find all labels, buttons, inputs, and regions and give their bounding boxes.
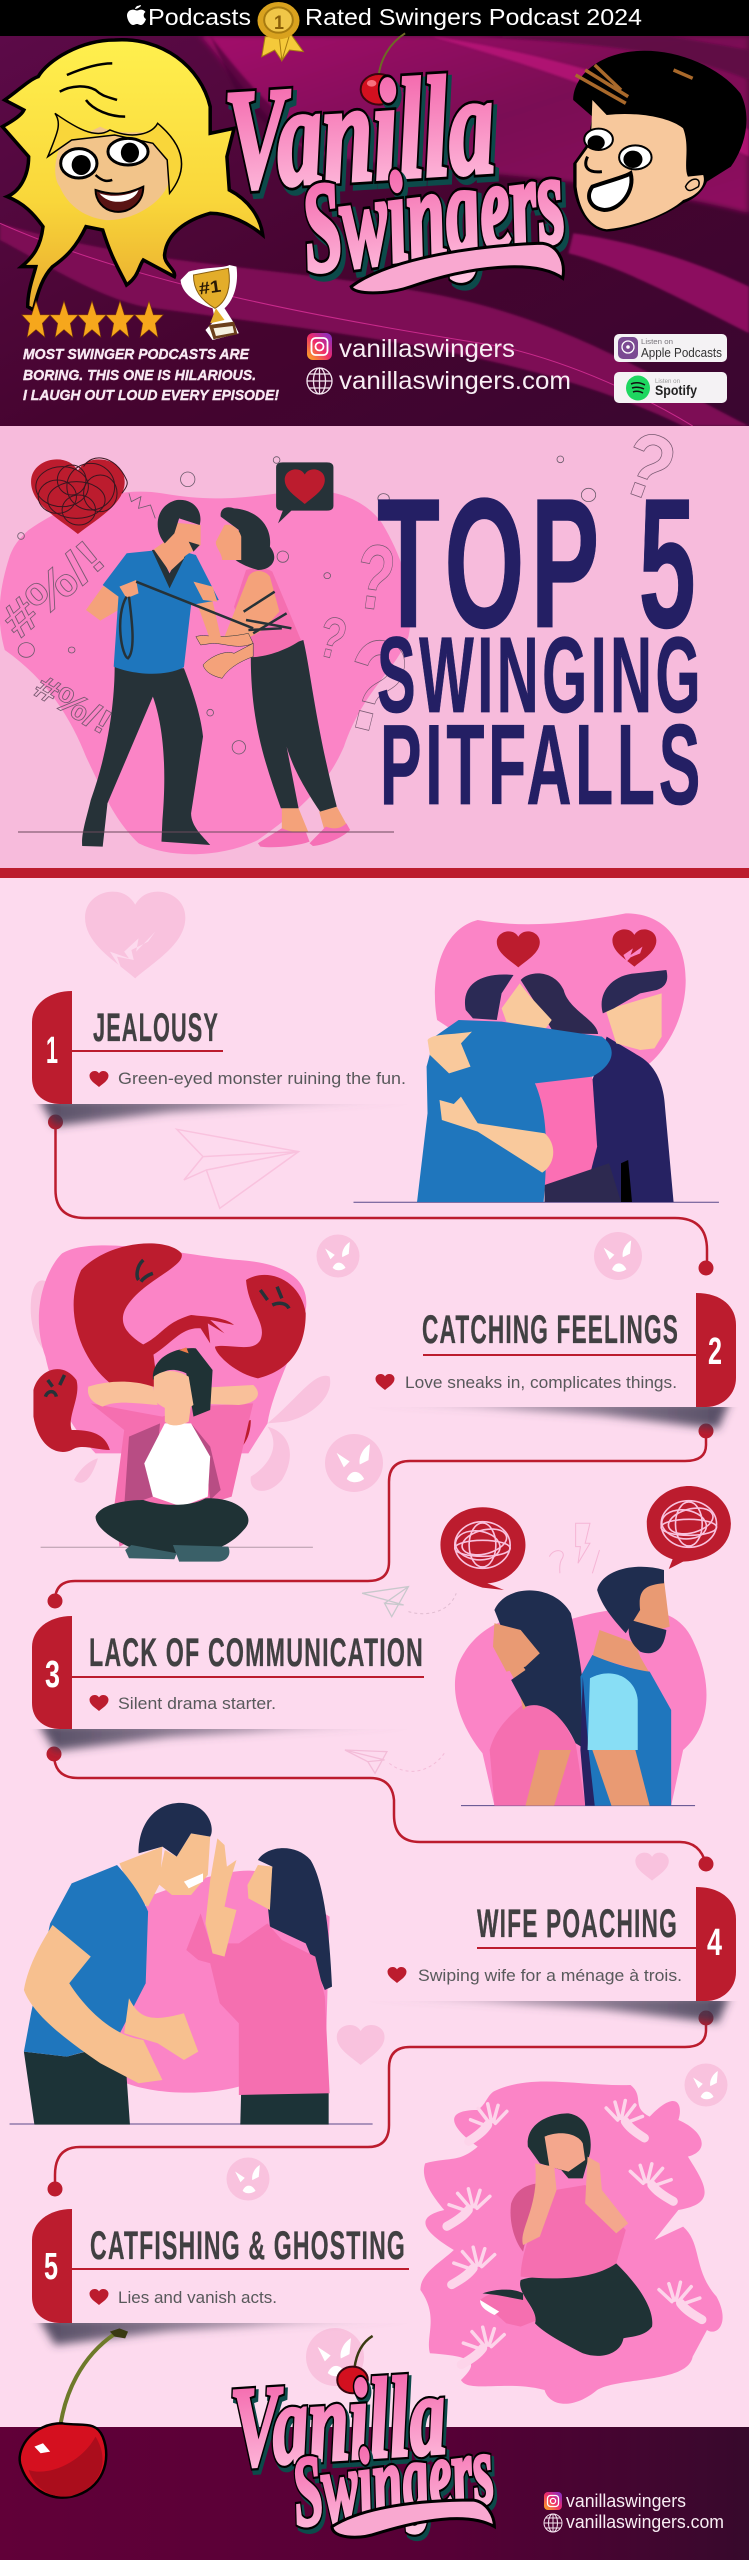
icon: instagram — [307, 333, 332, 360]
step 3: lack of communication — [32, 1616, 425, 1751]
step 1: jealousy: 1 — [46, 1030, 58, 1072]
step 2: catching feelings — [350, 1293, 736, 1429]
badge: apple podcasts — [614, 334, 727, 362]
step 2: catching feelings: 2 — [708, 1331, 722, 1373]
footer wordmark vanilla: Vanilla — [230, 2355, 451, 2495]
step 5: catfishing and ghosting: Lies and vanish acts. — [118, 2288, 277, 2307]
pink blob — [455, 1609, 707, 1806]
icon: number one gold medal — [257, 2, 303, 61]
footer wordmark swingers: Swingers — [286, 2413, 499, 2548]
icon: globe — [307, 368, 332, 394]
footer instagram handle: vanillaswingers — [566, 2491, 686, 2511]
pale plane — [362, 1587, 408, 1617]
man — [24, 2043, 130, 2125]
step 1: jealousy — [32, 991, 425, 1126]
badge: spotify: Spotify — [655, 382, 697, 398]
footer wordmark vanilla — [228, 2351, 451, 2495]
step 3: lack of communication: Silent drama starter. — [118, 1694, 276, 1713]
testimonial quote: BORING. THIS ONE IS HILARIOUS. — [23, 367, 256, 384]
hearts — [497, 931, 540, 967]
woman shoes — [258, 823, 350, 847]
doodles: symbols small: #%/! — [28, 668, 118, 742]
decor: angry faces — [226, 1232, 728, 2386]
testimonial quote — [23, 346, 279, 404]
top black bar — [0, 0, 749, 36]
badge: spotify — [614, 372, 727, 403]
icon: tangled heart — [31, 458, 127, 534]
footer website: vanillaswingers.com — [566, 2512, 724, 2532]
testimonial quote: MOST SWINGER PODCASTS ARE — [23, 346, 250, 363]
decor: paper plane — [177, 1129, 299, 1208]
logo wordmark vanilla — [221, 44, 502, 224]
footer logo cherry — [337, 2336, 373, 2393]
step 3: lack of communication: LACK OF COMMUNICATION — [89, 1631, 424, 1675]
woman legs — [282, 807, 348, 835]
badge: apple podcasts: Apple Podcasts — [641, 345, 722, 360]
badge: apple podcasts: Listen on — [641, 339, 673, 346]
icon: trophy — [181, 265, 239, 340]
logo wordmark swingers — [294, 127, 575, 305]
footer wordmark vanilla: Vanilla — [228, 2351, 449, 2491]
step 1: jealousy: Green-eyed monster ruining the fun. — [118, 1069, 406, 1088]
pale marks — [549, 1523, 600, 1573]
top bar text: rated: Rated Swingers Podcast 2024 — [305, 4, 642, 30]
illustration: hugging couple and jealous man — [353, 913, 719, 1202]
footer icon: globe — [544, 2514, 562, 2532]
pink blob — [0, 490, 411, 854]
doodles: circles — [18, 456, 596, 754]
illustration: back-to-back couple with tangled thoughts — [362, 1486, 731, 1806]
pink splash — [420, 2082, 723, 2404]
logo wordmark vanilla: Vanilla — [221, 44, 498, 219]
website: vanillaswingers.com — [339, 367, 571, 395]
illustration: anxious woman with monsters — [31, 1243, 330, 1562]
connector timeline — [46, 1114, 714, 2196]
rope — [120, 582, 291, 658]
hair — [153, 1348, 213, 1417]
logo wordmark vanilla: Vanilla — [221, 44, 498, 219]
top bar text: podcasts: Podcasts — [148, 4, 251, 30]
footer wordmark swingers — [286, 2413, 502, 2552]
woman — [490, 1687, 585, 1806]
trophy label: #1 — [198, 277, 222, 298]
pink blob — [39, 1245, 306, 1453]
step 4: wife poaching — [350, 1887, 736, 2023]
ground line — [18, 831, 394, 833]
illustration: blonde woman cartoon — [2, 40, 263, 310]
footer social handles — [544, 2491, 724, 2532]
ground — [41, 1546, 313, 1548]
figure — [511, 2183, 537, 2252]
step 4: wife poaching: 4 — [707, 1922, 722, 1964]
decor: pale broken heart — [85, 892, 185, 978]
pale splashes — [31, 1280, 330, 1491]
header banner — [0, 36, 749, 426]
ground — [461, 1805, 695, 1807]
badge: spotify: Listen on — [655, 379, 680, 385]
jealous man — [545, 1037, 674, 1202]
step 1: jealousy: JEALOUSY — [93, 1006, 219, 1050]
icon: large cherry — [20, 2328, 128, 2498]
pink blob — [435, 913, 686, 1070]
doodle question mark: ? — [349, 525, 401, 631]
instagram handle: vanillaswingers — [339, 335, 515, 363]
step 4: wife poaching: Swiping wife for a ménage à trois. — [418, 1966, 682, 1985]
woman head — [221, 507, 274, 570]
footer icon: instagram — [544, 2492, 562, 2510]
ground — [10, 2123, 373, 2125]
man — [82, 667, 210, 847]
thought bubbles — [440, 1507, 525, 1590]
pink blob — [119, 1871, 330, 2093]
icon: apple — [127, 5, 146, 25]
illustration: arguing couple with rope — [82, 500, 350, 847]
step 3: lack of communication: 3 — [45, 1654, 60, 1696]
illustration: arguing couple — [10, 1750, 669, 2125]
main logo: Vanilla Swingers — [221, 33, 575, 305]
five star rating — [22, 301, 163, 337]
social handles — [307, 333, 571, 395]
footer logo: Vanilla Swingers — [228, 2336, 502, 2552]
grabbing hands — [447, 2101, 702, 2365]
woman — [240, 2087, 329, 2125]
man — [592, 1630, 650, 1673]
ground — [353, 1201, 719, 1203]
footer logo swoosh — [332, 2500, 494, 2537]
red monsters — [33, 1243, 306, 1455]
arms — [88, 1382, 258, 1425]
illustration: dark haired man cartoon — [573, 51, 746, 232]
woman — [521, 973, 598, 1034]
logo wordmark vanilla: Vanilla — [224, 49, 502, 224]
doodle question mark top: ? — [608, 411, 688, 523]
medal numeral: 1 — [274, 13, 284, 34]
pale plane top — [345, 1750, 387, 1773]
step 2: catching feelings: Love sneaks in, complicates things. — [405, 1373, 677, 1392]
logo swoosh — [351, 243, 563, 293]
step 5: catfishing and ghosting: CATFISHING & GHOSTING — [90, 2224, 406, 2268]
testimonial quote: I LAUGH OUT LOUD EVERY EPISODE! — [23, 387, 279, 404]
footer band — [0, 2427, 749, 2560]
speech bubble with heart — [276, 462, 333, 523]
logo cherry — [361, 33, 405, 105]
footer wordmark swingers: Swingers — [289, 2417, 502, 2552]
step 5: catfishing and ghosting — [32, 2209, 425, 2345]
step 5: catfishing and ghosting: 5 — [44, 2246, 58, 2288]
footer wordmark swingers: Swingers — [286, 2413, 499, 2548]
illustration: frightened woman with grabbing hands — [420, 2082, 723, 2404]
pale hearts — [337, 2025, 385, 2065]
doodle question mark: ? — [312, 604, 353, 673]
shirt — [91, 1403, 253, 1547]
footer wordmark vanilla: Vanilla — [228, 2351, 449, 2491]
doodle question mark large: ? — [328, 608, 422, 764]
hugging man — [465, 975, 514, 1020]
pants and socks — [96, 1498, 248, 1553]
panel: hero — [0, 411, 749, 878]
